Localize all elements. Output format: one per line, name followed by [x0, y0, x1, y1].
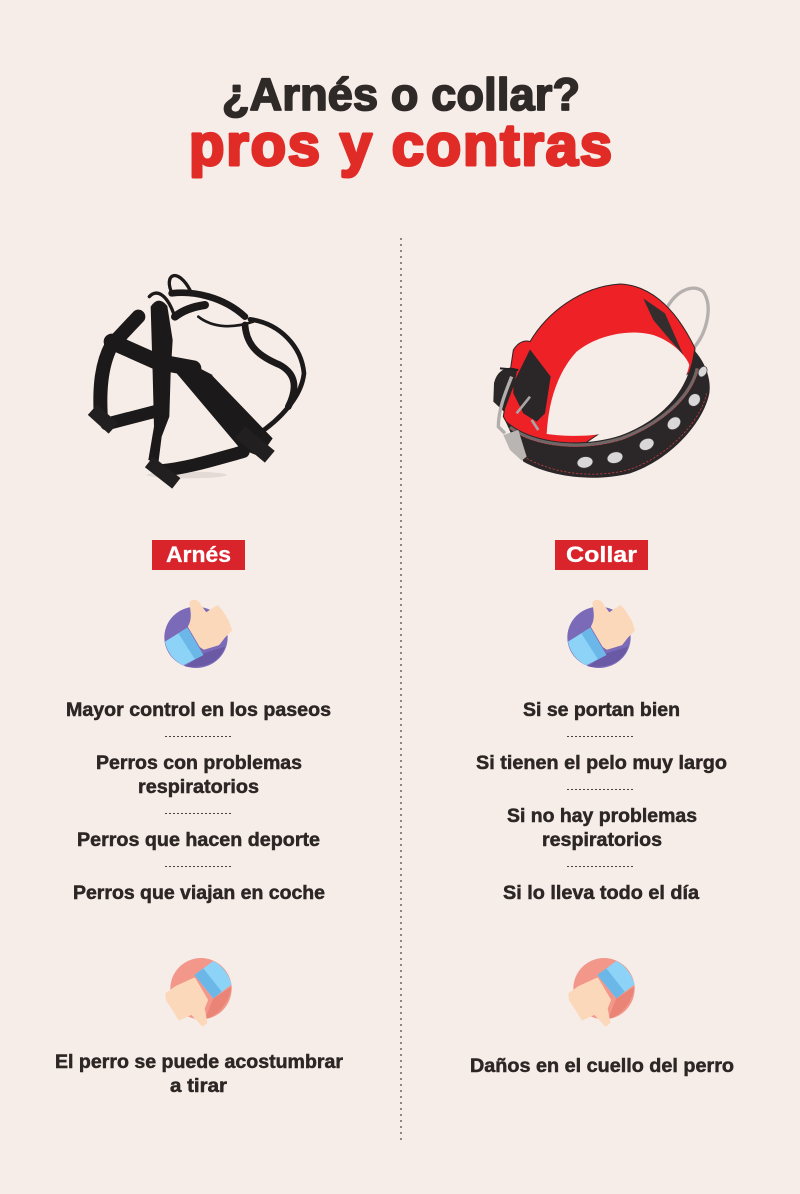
text: harness con: a tirar — [170, 1075, 227, 1097]
list: collar pros: Si lo lleva todo el día — [503, 882, 699, 904]
title — [189, 69, 612, 178]
list: harness pros: Mayor control en los paseos — [66, 699, 331, 721]
text: collar con: Daños en el cuello del perro — [470, 1055, 734, 1077]
badge: Collar: Collar — [566, 542, 637, 567]
icon: thumbs down, collar — [570, 958, 635, 1025]
list: collar pros: respiratorios — [542, 829, 662, 851]
list: collar pros: Si no hay problemas — [507, 805, 697, 827]
title: ¿Arnés o collar? — [222, 69, 580, 120]
list: harness pros: Perros que hacen deporte — [77, 829, 320, 851]
list: harness pros: respiratorios — [138, 776, 259, 798]
title: pros y contras — [189, 113, 612, 178]
photo: black dog harness — [88, 276, 304, 489]
icon: thumbs up, harness — [164, 601, 231, 668]
text: harness con: El perro se puede acostumbrar — [55, 1051, 343, 1073]
list: collar pros: Si tienen el pelo muy largo — [476, 752, 727, 774]
icon: thumbs up, collar — [567, 601, 634, 668]
text: harness con — [55, 1051, 343, 1097]
photo: red and black studded collar — [493, 284, 710, 478]
list: collar pros: Si se portan bien — [523, 699, 680, 721]
icon: thumbs down, harness — [167, 958, 232, 1025]
list: collar pros — [476, 699, 727, 904]
badge: Collar — [555, 540, 648, 570]
list: harness pros — [66, 699, 331, 904]
badge: Arnés: Arnés — [166, 542, 231, 567]
list: harness pros: Perros que viajan en coche — [73, 882, 325, 904]
list: harness pros: Perros con problemas — [96, 752, 302, 774]
badge: Arnés — [152, 540, 245, 570]
